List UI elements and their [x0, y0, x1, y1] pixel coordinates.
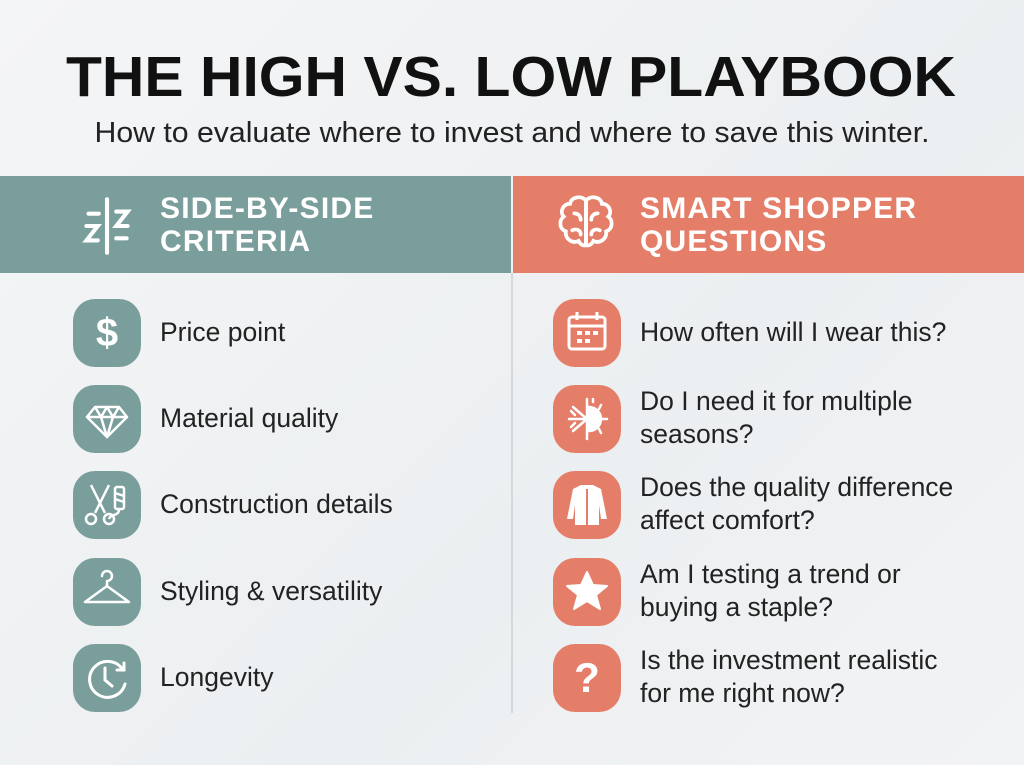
icon: jacket — [553, 471, 621, 539]
icon: snowflake sun — [553, 385, 621, 453]
criterion: styling & versatility: Styling & versatility — [160, 576, 382, 606]
divider — [511, 273, 513, 713]
question: trend or staple: Am I testing a trend or — [640, 559, 901, 589]
criterion: construction details — [73, 471, 393, 539]
panel header: side-by-side criteria — [0, 176, 511, 273]
question: investment realistic: for me right now? — [640, 678, 845, 708]
question: multiple seasons: seasons? — [640, 419, 753, 449]
icon: diamond — [73, 385, 141, 453]
question: multiple seasons — [553, 385, 912, 453]
criterion: longevity — [73, 644, 274, 712]
panel header: smart shopper questions — [513, 176, 1024, 273]
icon: question mark — [553, 644, 621, 712]
header text — [160, 192, 374, 258]
header text — [640, 192, 917, 258]
icon: brain — [558, 195, 614, 248]
icon: calendar — [553, 299, 621, 367]
criterion: longevity: Longevity — [160, 662, 273, 692]
icon: star — [553, 558, 621, 626]
criterion: material quality: Material quality — [160, 403, 338, 433]
icon: hanger — [73, 558, 141, 626]
header text: SIDE-BY-SIDE — [160, 192, 374, 225]
question: quality comfort: affect comfort? — [640, 505, 815, 535]
icon: dollar: $ — [96, 311, 118, 355]
question: trend or staple: buying a staple? — [640, 592, 833, 622]
title — [66, 45, 956, 149]
header text: QUESTIONS — [640, 225, 828, 258]
criterion: styling & versatility — [73, 558, 382, 626]
question: how often — [553, 299, 946, 367]
icon: question mark: ? — [574, 654, 600, 701]
criterion: material quality — [73, 385, 338, 453]
header text: SMART SHOPPER — [640, 192, 917, 225]
question: trend or staple — [553, 558, 901, 626]
icon: dollar — [73, 299, 141, 367]
question: how often: How often will I wear this? — [640, 317, 946, 347]
question: multiple seasons: Do I need it for multiple — [640, 386, 912, 416]
header text: CRITERIA — [160, 225, 311, 258]
criterion: price point: Price point — [160, 317, 285, 347]
question: quality comfort — [553, 471, 953, 539]
question: investment realistic — [553, 644, 938, 712]
title: THE HIGH VS. LOW PLAYBOOK — [66, 45, 956, 109]
icon: scissors and thread — [73, 471, 141, 539]
criterion: construction details: Construction details — [160, 489, 393, 519]
question: quality comfort: Does the quality difference — [640, 472, 953, 502]
icon: z compare — [82, 197, 132, 255]
question: investment realistic: Is the investment realistic — [640, 645, 938, 675]
title: How to evaluate where to invest and where to save this winter. — [94, 117, 930, 149]
icon: clock refresh — [73, 644, 141, 712]
criterion: price point — [73, 299, 286, 367]
